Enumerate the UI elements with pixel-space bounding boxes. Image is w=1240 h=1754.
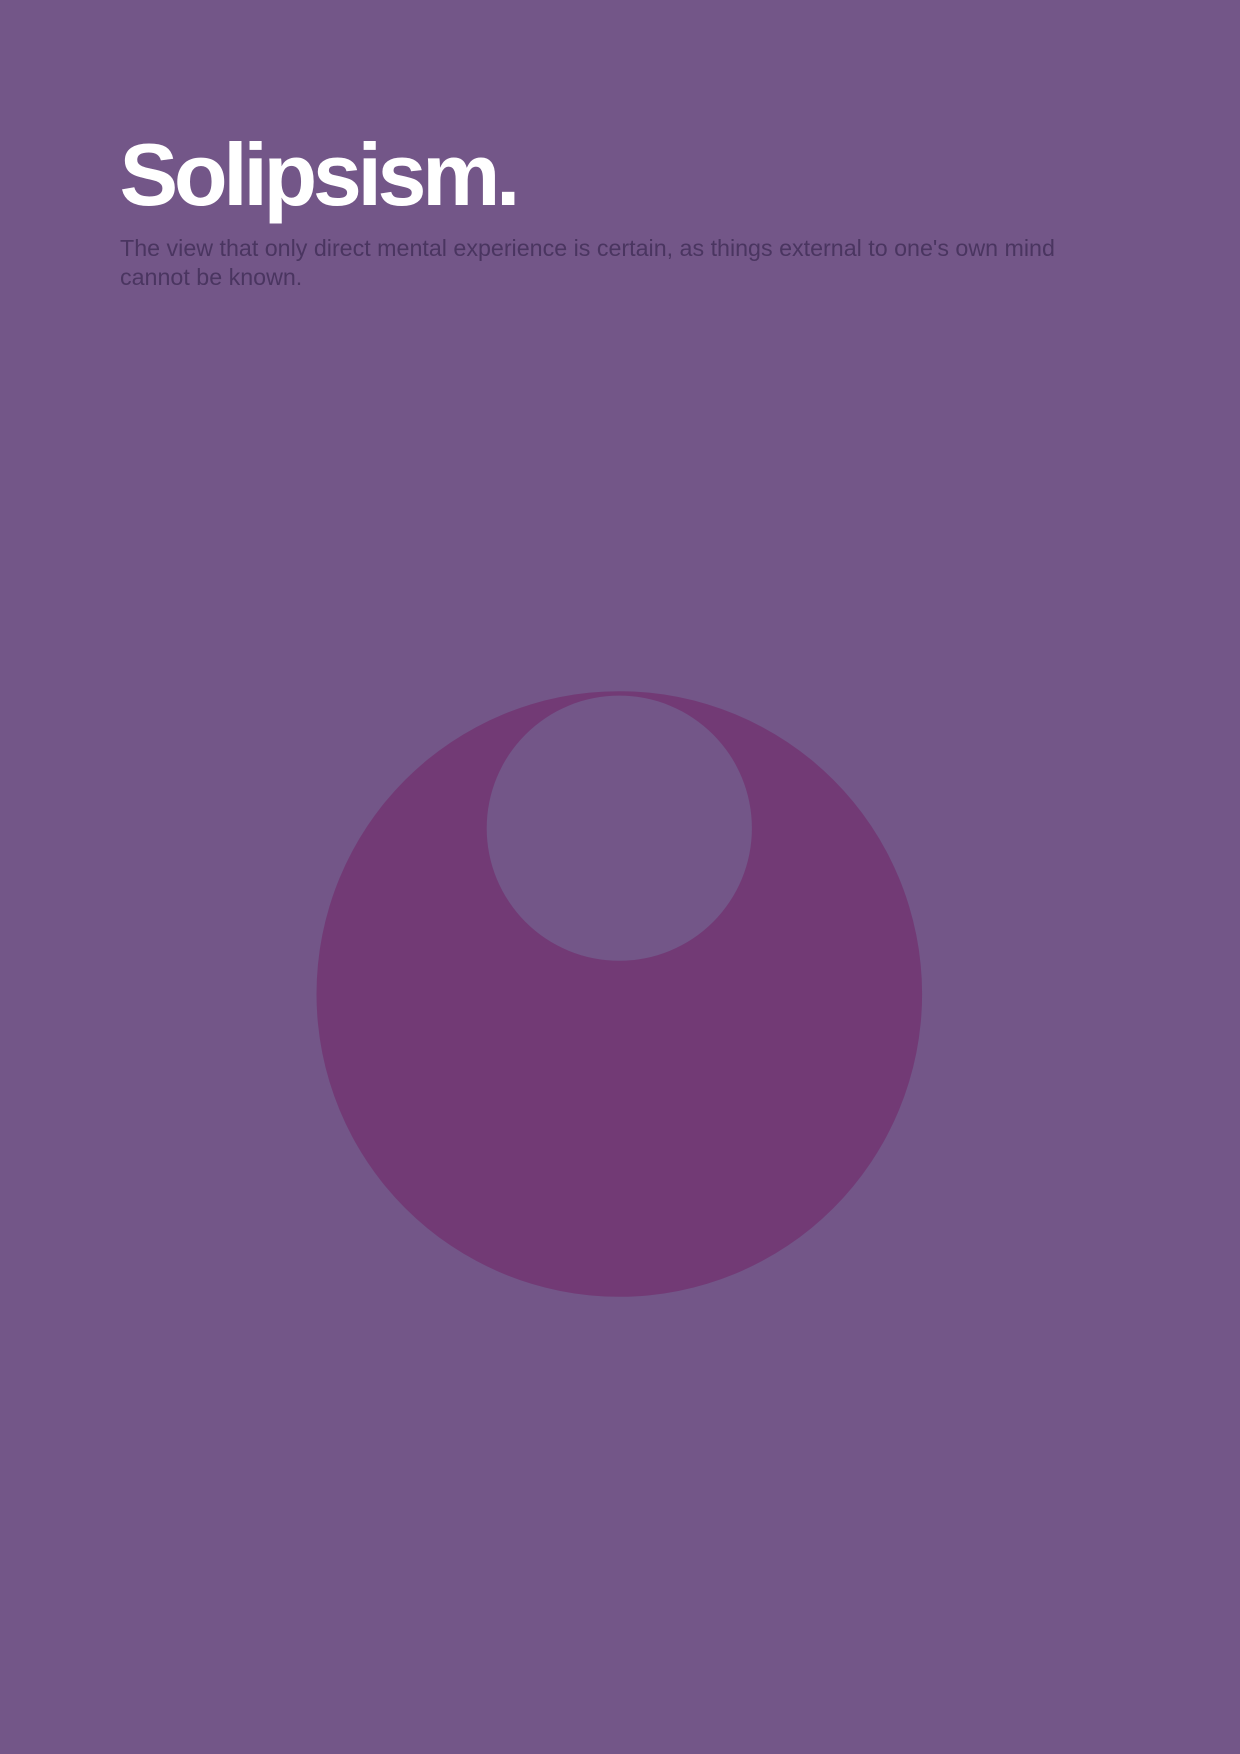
large circle: external world [316,691,922,1297]
small circle: own mind [487,696,752,961]
description text: The view that only direct mental experience is certain, as things external to one's own mind [120,235,1055,261]
title: Solipsism. [120,125,516,224]
description text [120,235,1055,290]
description text: cannot be known. [120,264,302,290]
